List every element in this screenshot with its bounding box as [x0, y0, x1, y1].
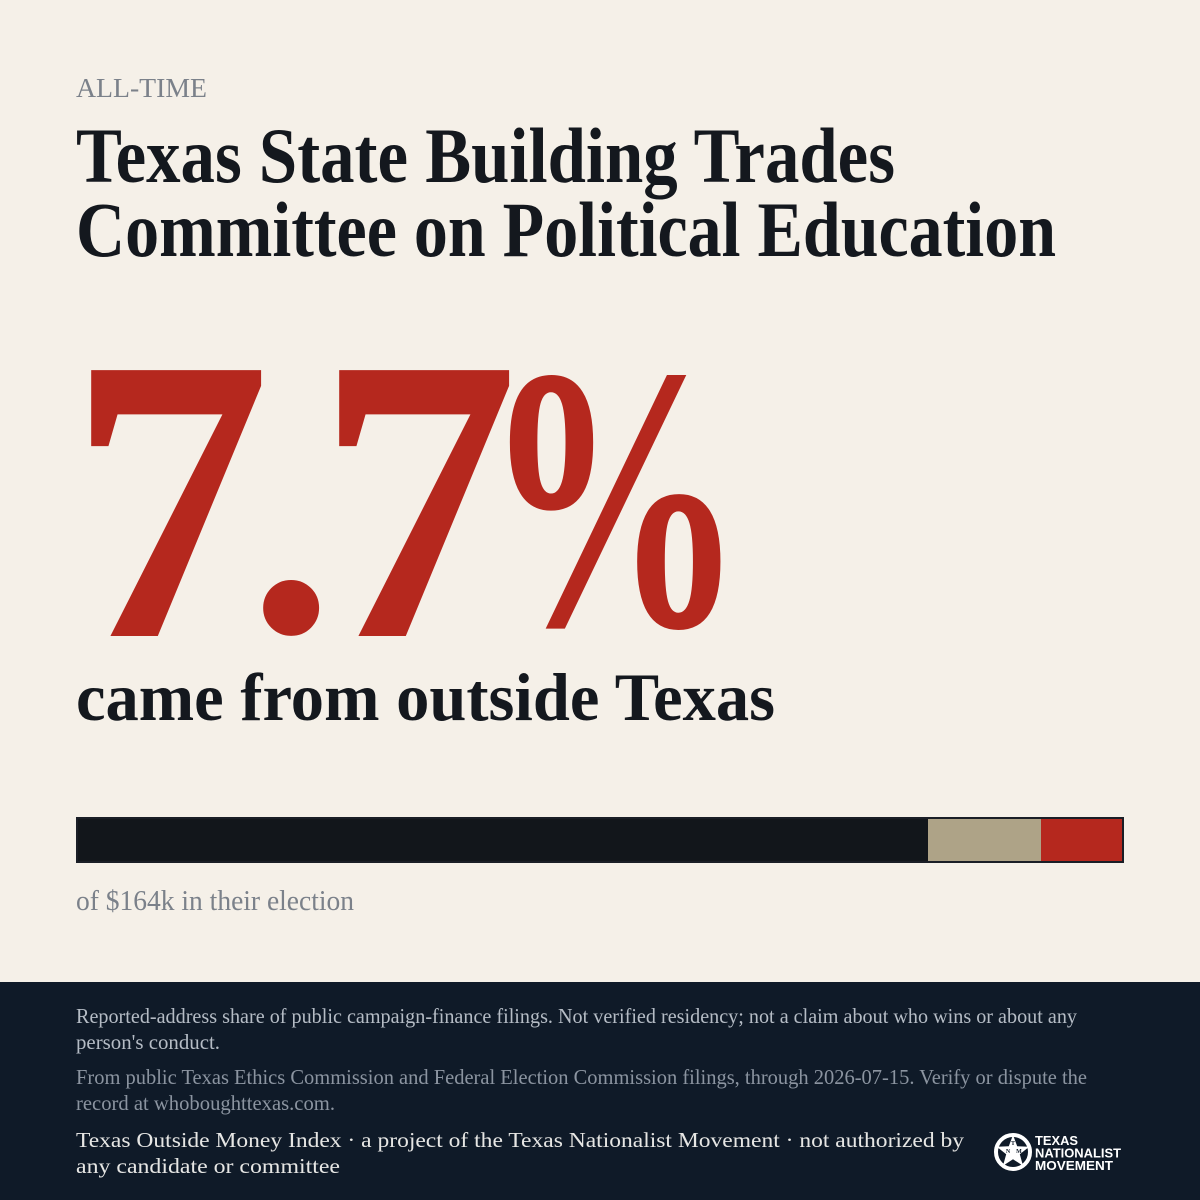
title: Committee on Political Education [76, 186, 1056, 273]
big number: 7.7%: 7 [316, 274, 519, 724]
stacked bar: share of funds [76, 817, 1124, 863]
icon: star in ring [996, 1135, 1030, 1169]
disclaimer text: person's conduct. [76, 1030, 220, 1054]
big number: 7.7% [68, 274, 745, 724]
logo wordmark: NATIONALIST [1035, 1146, 1121, 1160]
footer panel [0, 982, 1200, 1200]
title [76, 112, 1056, 273]
logo: Texas Nationalist Movement [996, 1133, 1121, 1173]
source text: record at whoboughttexas.com. [76, 1091, 335, 1115]
credit text: any candidate or committee [76, 1154, 340, 1178]
logo wordmark [1035, 1133, 1121, 1173]
big number: 7.7%: . [248, 324, 334, 706]
credit text [76, 1128, 964, 1178]
disclaimer text [76, 1004, 1077, 1054]
logo wordmark: MOVEMENT [1035, 1158, 1113, 1173]
title: Texas State Building Trades [76, 112, 895, 199]
big number: 7.7%: 7 [68, 274, 271, 724]
credit text: Texas Outside Money Index · a project of the Texas Nationalist Movement · not authorized by [76, 1128, 964, 1152]
icon: star in ring: T [1011, 1141, 1015, 1147]
source text: From public Texas Ethics Commission and Federal Election Commission filings, through 2026-07-15. Verify or dispute the [76, 1065, 1087, 1089]
eyebrow: ALL-TIME: ALL-TIME [76, 73, 207, 103]
source text [76, 1065, 1087, 1115]
subheading: came from outside Texas: came from outside Texas [76, 659, 775, 735]
logo wordmark: TEXAS [1035, 1133, 1078, 1148]
icon: star in ring: M [1016, 1149, 1022, 1155]
bar caption: of $164k in their election [76, 886, 354, 917]
disclaimer text: Reported-address share of public campaign-finance filings. Not verified residency; not a claim about who wins or about any [76, 1004, 1077, 1028]
big number: 7.7%: % [483, 291, 745, 707]
icon: star in ring: N [1006, 1149, 1011, 1155]
